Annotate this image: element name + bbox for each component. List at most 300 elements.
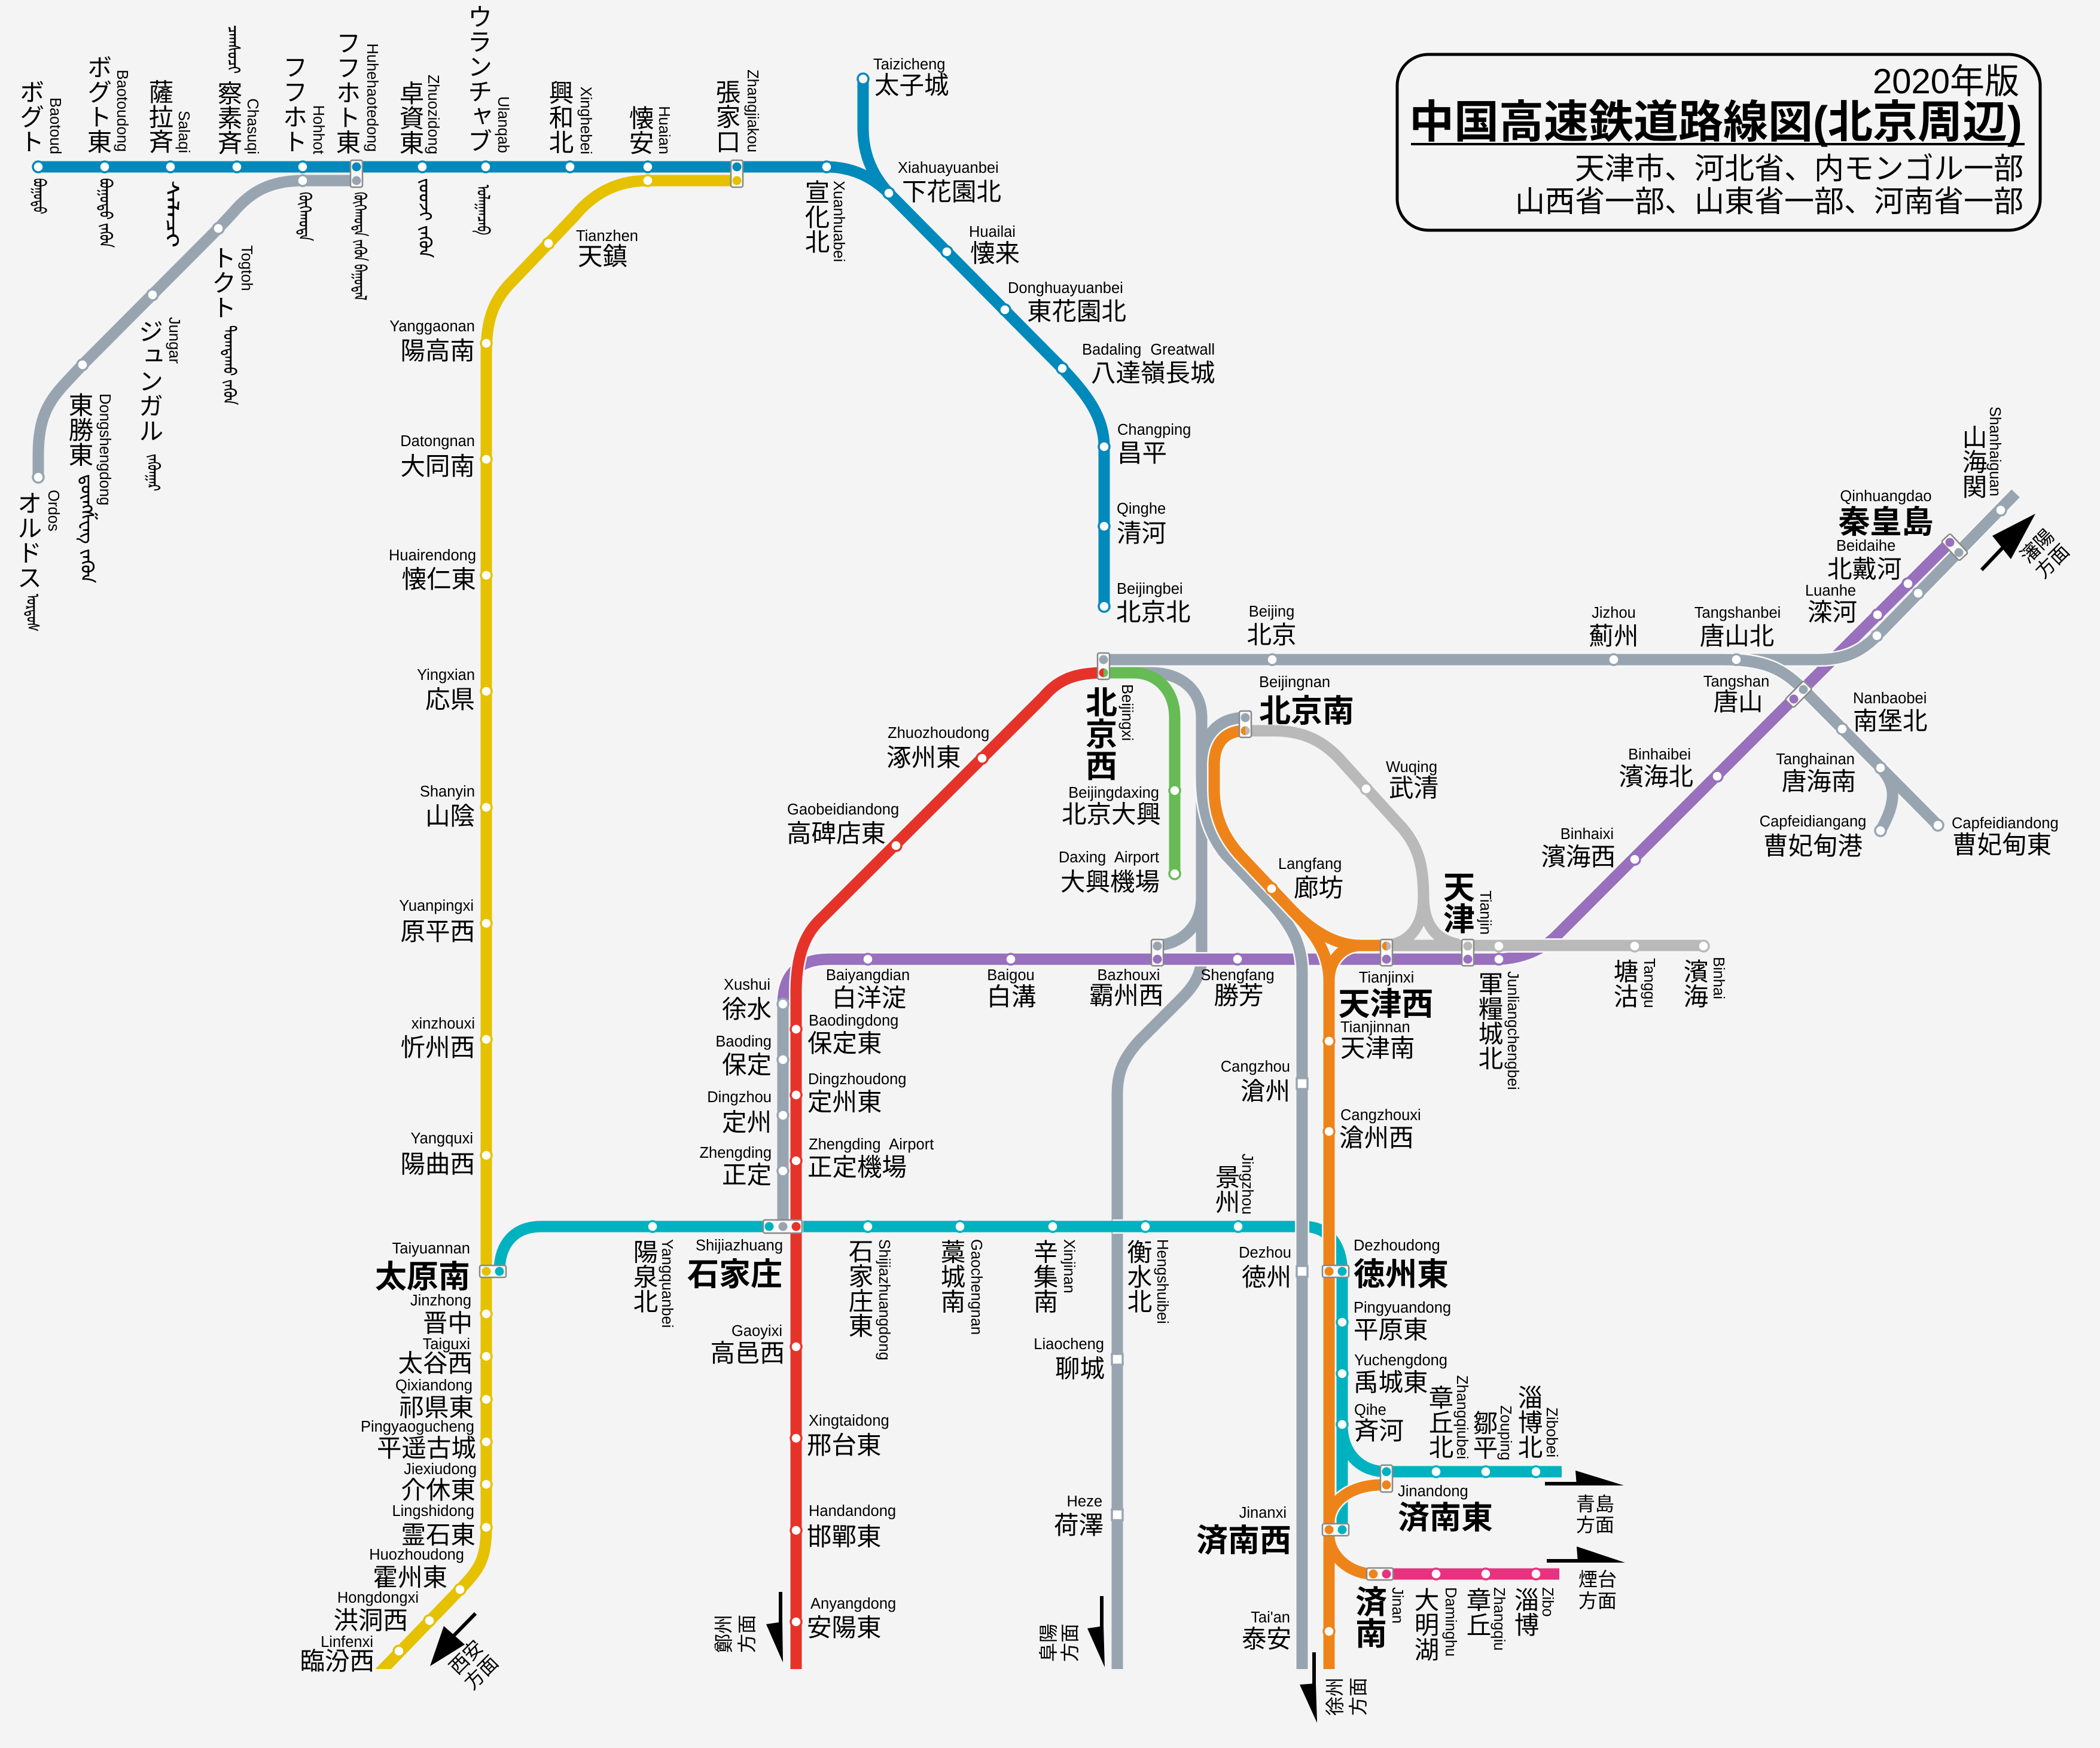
- title underline: [1411, 143, 2025, 145]
- station label: Yangquxi: Yangquxi: [411, 1130, 473, 1147]
- station label: Binhaixi: 濱海西: [1541, 843, 1616, 871]
- station label: Tanghainan: Tanghainan: [1776, 751, 1855, 768]
- station label: Dezhou: 徳州: [1242, 1263, 1291, 1291]
- interchange: Taiyuannan: [480, 1265, 506, 1277]
- station label: Togtoh: Togtoh: [238, 245, 255, 291]
- station label: Heze: 荷澤: [1054, 1511, 1104, 1539]
- station label: Jinan: 済南: [1351, 1585, 1386, 1649]
- station label: Shijiazhuangdong: [845, 1238, 892, 1360]
- station label: Shanyin: [420, 783, 475, 830]
- station label: Gaoyixi: Gaoyixi: [732, 1323, 782, 1340]
- station label: Zibobei: 淄博北: [1514, 1385, 1542, 1459]
- station label: Beidaihe: [1827, 538, 1902, 583]
- station label: Baotou: [16, 79, 63, 214]
- station label: Liaocheng: [1034, 1336, 1105, 1383]
- line: Xushui to Qinhuangdao (purple): [783, 541, 1951, 1005]
- station label: Hohhot: ᠬᠥᠬᠡᠬᠣᠲᠠ: [295, 192, 314, 241]
- station label: Zhengding Airport: [807, 1136, 934, 1181]
- station label: Binhai: 濱海: [1680, 959, 1708, 1008]
- station label: Ulanqab: [464, 4, 511, 235]
- station label: Dongshengdong: 東勝東: [65, 392, 93, 466]
- direction label: Zhengzhou: 方面: [736, 1615, 758, 1653]
- arrow: Qingdao direction: [1545, 1471, 1624, 1485]
- station label: Daxing Airport: [1059, 849, 1160, 896]
- direction label: Yantai: 方面: [1578, 1590, 1617, 1612]
- station label: Huhehaotedong: フフホト東: [333, 30, 360, 154]
- station label: Pingyuandong: 平原東: [1354, 1316, 1428, 1344]
- station label: Qihe: Qihe: [1354, 1402, 1386, 1418]
- station label: Beijingbei: 北京北: [1116, 598, 1191, 626]
- station label: Jinan: [1351, 1585, 1406, 1649]
- stations: grey lines: [33, 175, 2006, 1176]
- direction label: Zhengzhou: [713, 1615, 758, 1653]
- direction label: Xi'an: 方面: [460, 1651, 502, 1694]
- station label: Gaobeidiandong: [787, 801, 899, 847]
- station label: Cangzhou: Cangzhou: [1221, 1058, 1290, 1075]
- direction label: Fuyang: 方面: [1059, 1624, 1081, 1662]
- station label: Junliangchengbei: 軍糧城北: [1475, 971, 1502, 1070]
- station label: Zibobei: [1514, 1385, 1560, 1459]
- station label: Xuanhuabei: [801, 179, 847, 262]
- station label: Cangzhou: [1221, 1058, 1290, 1105]
- station label: Wuqing: Wuqing: [1386, 759, 1437, 776]
- station label: Tanghainan: 唐海南: [1782, 767, 1856, 795]
- station label: Huhehaotedong: ᠬᠥᠬᠡᠬᠣᠲᠠ ᠵᠡᠭᠦᠨ ᠪᠠᠭᠤᠳᠠᠯ: [350, 192, 369, 300]
- station label: Yingxian: 応県: [425, 685, 475, 713]
- station label: Jingzhou: 景州: [1212, 1164, 1239, 1214]
- station label: Baiyangdian: 白洋淀: [832, 984, 906, 1012]
- station label: Hohhot: [279, 54, 327, 241]
- station label: Shengfang: [1200, 967, 1275, 1009]
- station label: Qihe: [1354, 1402, 1404, 1445]
- station label: Anyangdong: [807, 1596, 896, 1642]
- station label: Huozhoudong: 霍州東: [373, 1563, 447, 1591]
- station label: Gaochengnan: 藁城南: [937, 1239, 965, 1313]
- station label: Jinzhong: [410, 1292, 473, 1337]
- station label: Jungar: ᠵᠡᠭᠦᠨᠭᠠᠷ: [144, 454, 163, 491]
- station label: Zhangjiakou: [712, 69, 761, 154]
- station label: Huaian: [626, 105, 672, 155]
- station label: Zhangqiubei: [1425, 1375, 1470, 1459]
- station label: Baoding: Baoding: [715, 1033, 772, 1050]
- station label: Baodingdong: Baodingdong: [809, 1012, 898, 1029]
- arrow: Xuzhou direction: [1300, 1652, 1317, 1723]
- station label: Beijingxi: Beijingxi: [1118, 684, 1135, 741]
- station label: Zibo: 淄博: [1511, 1587, 1538, 1637]
- station label: Zhangjiakou: 張家口: [712, 79, 740, 154]
- line: Beijingxi to Anyangdong (red): [796, 673, 1104, 1669]
- station label: Jungar: ジュンガル: [135, 319, 163, 443]
- station label: Zhengding Airport: 正定機場: [807, 1153, 907, 1181]
- station label: Shanhaiguan: Shanhaiguan: [1986, 407, 2003, 496]
- station label: Zhangqiu: Zhangqiu: [1491, 1587, 1507, 1651]
- direction label: Shenyang: 瀋陽: [2016, 525, 2058, 567]
- station label: Langfang: [1278, 856, 1343, 902]
- station label: Capfeidiandong: Capfeidiandong: [1952, 815, 2059, 832]
- station label: Dezhou: [1239, 1244, 1291, 1291]
- station label: Tai'an: Tai'an: [1251, 1609, 1290, 1626]
- station label: Beijingnan: Beijingnan: [1259, 674, 1330, 691]
- station label: Xinghebei: [545, 80, 594, 154]
- station label: Nanbaobei: [1853, 690, 1928, 735]
- station label: Dezhoudong: Dezhoudong: [1354, 1237, 1440, 1254]
- station label: Bazhouxi: 霸州西: [1089, 981, 1163, 1009]
- station label: Datongnan: [400, 433, 475, 480]
- station label: Jinandong: Jinandong: [1398, 1483, 1468, 1500]
- station label: Ordos: Ordos: [45, 490, 62, 531]
- station label: Beijingxi: 北京西: [1081, 686, 1117, 781]
- station label: Yuchengdong: 禹城東: [1354, 1368, 1428, 1396]
- station label: Jinandong: 済南東: [1398, 1500, 1493, 1536]
- station label: Baiyangdian: Baiyangdian: [826, 967, 910, 984]
- station label: Changping: [1117, 422, 1191, 467]
- station label: Zouping: 鄒平: [1469, 1410, 1498, 1460]
- station label: Huhehaotedong: Huhehaotedong: [364, 43, 380, 152]
- station label: Cangzhouxi: 滄州西: [1339, 1124, 1414, 1152]
- direction label: Fuyang: 阜陽: [1038, 1624, 1059, 1662]
- direction label: Shenyang: 方面: [2031, 540, 2074, 582]
- station label: Shijiazhuangdong: 石家庄東: [845, 1238, 873, 1338]
- station label: Wuqing: [1386, 759, 1438, 802]
- station label: Chasuqi: ᠴᠠᠭᠰᠤᠴᠢ: [224, 25, 243, 74]
- line: Ordos to Hohhot east (grey): [38, 181, 356, 477]
- station label: Beidaihe: 北戴河: [1827, 555, 1902, 583]
- station label: Cangzhouxi: Cangzhouxi: [1340, 1107, 1421, 1124]
- station label: Salaqi: 薩拉斉: [145, 79, 173, 154]
- station label: Tianjinnan: 天津南: [1340, 1034, 1415, 1062]
- interchange: Zhangjiakou: [731, 160, 743, 187]
- station label: xinzhouxi: xinzhouxi: [412, 1015, 475, 1032]
- station label: Xinghebei: Xinghebei: [577, 87, 594, 154]
- station label: Daxing Airport: 大興機場: [1060, 868, 1160, 896]
- station label: Dingzhou: 定州: [722, 1108, 772, 1136]
- station label: Handandong: 邯鄲東: [807, 1523, 882, 1551]
- station label: Hohhot: Hohhot: [310, 105, 327, 154]
- station label: Zhangqiu: [1463, 1587, 1507, 1651]
- subtitle line 2: 山西省一部、山東省一部、河南省一部: [1515, 185, 2023, 218]
- station label: Capfeidiangang: [1760, 813, 1866, 860]
- station label: Taiguxi: Taiguxi: [423, 1336, 470, 1353]
- arrow: Zhengzhou direction: [766, 1592, 783, 1662]
- direction label: Zhengzhou: 鄭州: [713, 1615, 734, 1653]
- station label: Zhangjiakou: Zhangjiakou: [744, 69, 761, 152]
- station label: Ulanqab: ᠤᠯᠠᠭᠠᠨᠴᠠᠪ: [473, 185, 492, 235]
- station label: Tianzhen: Tianzhen: [576, 228, 638, 245]
- stations: green line: [1169, 785, 1180, 879]
- stations: pink line: [1431, 1569, 1541, 1579]
- station label: Changping: 昌平: [1117, 439, 1167, 467]
- station label: Jinanxi: 済南西: [1196, 1523, 1291, 1558]
- station label: Taizicheng: Taizicheng: [873, 56, 945, 73]
- station label: Dingzhoudong: [807, 1071, 906, 1116]
- station label: Qixiandong: 祁県東: [399, 1393, 474, 1421]
- direction label: Fuyang: [1038, 1624, 1081, 1662]
- station label: Tanghainan: [1776, 751, 1856, 795]
- station label: Tianjinxi: 天津西: [1339, 987, 1433, 1022]
- station label: Xuanhuabei: 宣化北: [801, 179, 830, 254]
- direction label: Yantai: [1578, 1569, 1617, 1612]
- station label: Handandong: Handandong: [809, 1503, 896, 1520]
- station label: Beidaihe: Beidaihe: [1836, 538, 1895, 554]
- station label: Junliangchengbei: [1475, 971, 1521, 1090]
- station label: Yangquanbei: Yangquanbei: [659, 1239, 675, 1328]
- station label: Ulanqab: ウランチャブ: [464, 4, 492, 153]
- station label: xinzhouxi: 忻州西: [400, 1033, 475, 1061]
- direction label: Qingdao: 方面: [1576, 1514, 1614, 1536]
- station label: Handandong: [807, 1503, 896, 1551]
- station label: Xiahuayuanbei: [898, 160, 1001, 206]
- station label: Tangshan: Tangshan: [1703, 673, 1769, 690]
- interchange: Tianjinxi: [1380, 939, 1392, 966]
- station label: Jungar: Jungar: [166, 317, 182, 364]
- stations: teal line: [647, 1221, 1541, 1477]
- station label: Hohhot: フフホト: [279, 54, 307, 154]
- station label: Luanhe: Luanhe: [1805, 582, 1856, 599]
- station label: Huailai: [969, 224, 1020, 267]
- station label: Tianjinxi: [1339, 969, 1433, 1022]
- station label: Xushui: Xushui: [724, 977, 770, 993]
- station label: Dezhoudong: 徳州東: [1354, 1257, 1449, 1292]
- station label: Taizicheng: [873, 56, 949, 99]
- interchange: Tianjin: [1462, 939, 1474, 966]
- station label: xinzhouxi: [400, 1015, 475, 1061]
- station label: Zhuozidong: ᠵᠤᠤᠵᠢ ᠵᠡᠭᠦᠨ: [415, 178, 434, 258]
- station label: Tai'an: 泰安: [1242, 1625, 1291, 1653]
- station label: Xushui: 徐水: [722, 995, 772, 1023]
- station label: Dingzhoudong: 定州東: [807, 1088, 882, 1116]
- station label: Zhuozidong: 卓資東: [396, 80, 423, 155]
- station label: Dongshengdong: [65, 392, 113, 584]
- station label: Yuchengdong: Yuchengdong: [1354, 1352, 1447, 1369]
- station label: Zhengding: 正定: [722, 1161, 772, 1189]
- station label: Tanggu: 塘沽: [1610, 959, 1638, 1008]
- station label: Linfenxi: [300, 1634, 374, 1675]
- station label: Gaobeidiandong: 高碑店東: [787, 819, 886, 847]
- station label: Shanhaiguan: [1958, 407, 2003, 499]
- interchange: Huhehaotedong: [350, 160, 362, 187]
- station label: Langfang: Langfang: [1278, 856, 1342, 873]
- station label: Junliangchengbei: Junliangchengbei: [1504, 971, 1521, 1090]
- station label: Shanhaiguan: 山海関: [1958, 425, 1987, 499]
- station label: Baotou: ᠪᠤᠭᠤᠲᠤ: [29, 178, 48, 214]
- interchange: Beijingxi: [1098, 653, 1110, 679]
- station label: Dongshengdong: Dongshengdong: [96, 393, 113, 505]
- station label: Jinzhong: 晋中: [423, 1309, 473, 1337]
- line: Taiyuannan to Zibobei (teal): [499, 1227, 1562, 1530]
- station label: Liaocheng: 聊城: [1055, 1355, 1105, 1383]
- station label: Capfeidiandong: 曹妃甸東: [1952, 831, 2052, 859]
- stations: red line: [791, 753, 987, 1627]
- station label: Binhaibei: 濱海北: [1619, 762, 1693, 791]
- station label: Taizicheng: 太子城: [874, 71, 949, 99]
- station label: Donghuayuanbei: [1008, 280, 1126, 325]
- station label: Taiguxi: [398, 1336, 473, 1377]
- direction label: Xuzhou: 方面: [1348, 1677, 1369, 1716]
- line: Jinan to Zibo (pink): [1386, 1568, 1559, 1580]
- station label: Zhuozidong: [396, 75, 441, 258]
- station label: Tangshan: 唐山: [1713, 688, 1763, 716]
- direction label: Xuzhou: [1324, 1677, 1369, 1716]
- stations: square non-high-speed stops: [1112, 1078, 1307, 1520]
- stations: orange line: [1266, 883, 1334, 1637]
- station label: Cangzhouxi: [1339, 1107, 1421, 1152]
- station label: Yanggaonan: Yanggaonan: [389, 318, 475, 335]
- station label: Zhangqiu: 章丘: [1463, 1587, 1491, 1637]
- station label: Tanggu: [1610, 958, 1657, 1008]
- station label: Anyangdong: Anyangdong: [810, 1596, 896, 1612]
- station label: Gaoyixi: 高邑西: [710, 1339, 785, 1367]
- station label: Beijingdaxing: [1062, 785, 1161, 828]
- station label: Baotoudong: [84, 54, 130, 248]
- station label: Huairendong: Huairendong: [389, 547, 476, 564]
- direction label: Shenyang: [2016, 525, 2074, 582]
- station label: Qinhuangdao: [1839, 488, 1933, 540]
- station label: Baoding: 保定: [722, 1051, 772, 1079]
- direction label: Qingdao: [1576, 1493, 1614, 1536]
- station label: Qinghe: [1117, 501, 1166, 547]
- station label: Jizhou: 薊州: [1589, 622, 1639, 650]
- direction label: Qingdao: 青島: [1576, 1493, 1614, 1515]
- station label: Qixiandong: [395, 1377, 474, 1421]
- station label: Capfeidiangang: Capfeidiangang: [1760, 813, 1866, 830]
- station label: Huozhoudong: Huozhoudong: [369, 1546, 464, 1563]
- station label: Tianjinnan: Tianjinnan: [1340, 1019, 1410, 1036]
- interchange: Shijiazhuang: [763, 1220, 802, 1233]
- subtitle line 1: 天津市、河北省、内モンゴル一部: [1575, 152, 2023, 185]
- station label: Xingtaidong: [807, 1413, 889, 1459]
- station label: Shijiazhuangdong: Shijiazhuangdong: [876, 1239, 892, 1360]
- station label: Zibo: Zibo: [1539, 1587, 1556, 1617]
- station label: Jinan: Jinan: [1389, 1587, 1406, 1624]
- station label: Nanbaobei: 南堡北: [1853, 707, 1928, 735]
- station label: Shijiazhuang: Shijiazhuang: [696, 1237, 783, 1254]
- station label: Yuanpingxi: Yuanpingxi: [399, 898, 474, 914]
- station label: Binhaixi: [1541, 826, 1616, 871]
- station label: Baodingdong: 保定東: [807, 1029, 882, 1057]
- station label: Zhuozhoudong: Zhuozhoudong: [888, 725, 989, 742]
- station label: Qihe: 斉河: [1354, 1417, 1404, 1445]
- station label: Baotou: Baotoud: [47, 97, 63, 154]
- station label: Datongnan: 大同南: [400, 452, 475, 480]
- station label: Shengfang: 勝芳: [1214, 981, 1264, 1009]
- station label: Binhaibei: [1619, 746, 1693, 791]
- station label: Ordos: ᠣᠷᠳᠣᠰ: [23, 594, 42, 632]
- station label: Yangquxi: [400, 1130, 475, 1178]
- interchange: Jinanxi: [1322, 1524, 1349, 1536]
- station label: Tianzhen: [576, 228, 638, 270]
- station label: Huailai: Huailai: [969, 224, 1016, 240]
- station label: Taiyuannan: [375, 1240, 470, 1295]
- line: Beijingxi to Heze lower section crossing (grey): [1202, 777, 1302, 1669]
- line: Zhangjiakou to Linfenxi (yellow): [378, 181, 737, 1674]
- station label: Binhai: [1680, 957, 1727, 1008]
- station label: Huaian: Huaian: [656, 106, 672, 154]
- station label: Donghuayuanbei: 東花園北: [1027, 297, 1126, 325]
- station label: Yuchengdong: [1354, 1352, 1447, 1396]
- station label: Daxing Airport: Daxing Airport: [1059, 849, 1159, 866]
- station label: Hongdongxi: [333, 1590, 419, 1634]
- station label: Zouping: [1469, 1405, 1514, 1460]
- station label: Gaochengnan: Gaochengnan: [968, 1239, 985, 1335]
- station label: Baigou: Baigou: [987, 967, 1035, 984]
- station label: Togtoh: トクト: [208, 245, 236, 319]
- station label: Dingzhoudong: Dingzhoudong: [808, 1071, 906, 1088]
- station label: Qinghe: 清河: [1117, 519, 1166, 547]
- station label: Tianjinxi: Tianjinxi: [1359, 969, 1414, 986]
- station label: Zouping: Zouping: [1497, 1405, 1514, 1460]
- station label: Jinandong: [1398, 1483, 1493, 1536]
- station label: Jiexiudong: [401, 1461, 477, 1504]
- station label: Xingtaidong: Xingtaidong: [809, 1413, 889, 1429]
- station label: Xushui: [722, 977, 772, 1023]
- station label: Beijingbei: Beijingbei: [1117, 581, 1183, 597]
- line: Beijingxi to Shanhaiguan (grey) with Caofeidian branch: [1104, 493, 2016, 831]
- station label: Jingzhou: [1212, 1154, 1255, 1215]
- station label: Huhehaotedong: [333, 30, 380, 300]
- station label: Yanggaonan: 陽高南: [400, 337, 475, 365]
- station label: Pingyaogucheng: Pingyaogucheng: [361, 1418, 474, 1435]
- station label: Shanyin: Shanyin: [420, 783, 475, 800]
- station label: Beijingxi: [1081, 684, 1135, 781]
- station label: Tianjin: Tianjin: [1477, 890, 1494, 935]
- arrow: Shenyang direction: [1982, 514, 2035, 570]
- station label: Tangshanbei: [1694, 605, 1781, 650]
- interchange: Jinandong: [1380, 1465, 1392, 1492]
- line: grey Beijingxi to Heze with Bazhouxi and Beijingnan branches: [1104, 673, 1245, 1669]
- station label: Ordos: オルドス: [13, 490, 42, 590]
- direction label: Xi'an: [445, 1636, 502, 1694]
- station label: Beijing: Beijing: [1249, 603, 1294, 620]
- station label: Tangshanbei: 唐山北: [1700, 622, 1774, 650]
- station label: Huairendong: 懐仁東: [401, 565, 476, 593]
- station label: Daminghu: Daminghu: [1442, 1587, 1459, 1657]
- station label: Taiguxi: 太谷西: [398, 1349, 473, 1377]
- station label: Nanbaobei: Nanbaobei: [1853, 690, 1927, 707]
- station label: Dongshengdong: ᠳ᠋ᠦᠩᠱᠧᠩ ᠵᠡᠭᠦᠨ: [77, 474, 99, 584]
- interchange: Beijingnan: [1239, 711, 1251, 737]
- station label: Jizhou: Jizhou: [1592, 605, 1636, 621]
- station label: Tianzhen: 天鎮: [578, 242, 627, 270]
- station label: Yangquanbei: 陽泉北: [629, 1239, 658, 1313]
- station label: Salaqi: [145, 79, 192, 248]
- station label: Linfenxi: 臨汾西: [300, 1647, 374, 1675]
- station label: Beijingdaxing: Beijingdaxing: [1068, 785, 1159, 801]
- station label: Bazhouxi: [1089, 967, 1163, 1009]
- station label: Dingzhou: [707, 1089, 772, 1136]
- station label: Gaochengnan: [937, 1239, 985, 1335]
- station label: Chasuqi: Chasuqi: [244, 98, 261, 154]
- interchange: Tangshan: [1785, 681, 1812, 708]
- station label: Baotoudong: Baotoudong: [114, 69, 130, 152]
- station label: Hongdongxi: Hongdongxi: [337, 1590, 419, 1606]
- station label: Zibobei: Zibobei: [1543, 1407, 1560, 1457]
- station label: Datongnan: Datongnan: [400, 433, 475, 450]
- station label: Qinhuangdao: Qinhuangdao: [1840, 488, 1932, 505]
- stations: yellow line: [394, 175, 653, 1657]
- station label: Zhengding: [699, 1145, 772, 1189]
- station label: Capfeidiangang: 曹妃甸港: [1763, 832, 1863, 860]
- station label: Luanhe: [1805, 582, 1857, 626]
- station label: Hengshuibei: 衡水北: [1123, 1239, 1152, 1313]
- arrow: Xi'an direction: [430, 1613, 476, 1666]
- station label: Wuqing: 武清: [1389, 774, 1438, 802]
- station label: Xinjinan: [1030, 1239, 1077, 1313]
- station label: Shengfang: Shengfang: [1200, 967, 1275, 984]
- arrow: Fuyang direction: [1087, 1596, 1105, 1667]
- station label: Ordos: [13, 490, 62, 632]
- station label: Ulanqab: Ulanqab: [495, 96, 511, 153]
- station label: Tangshanbei: Tangshanbei: [1694, 605, 1781, 621]
